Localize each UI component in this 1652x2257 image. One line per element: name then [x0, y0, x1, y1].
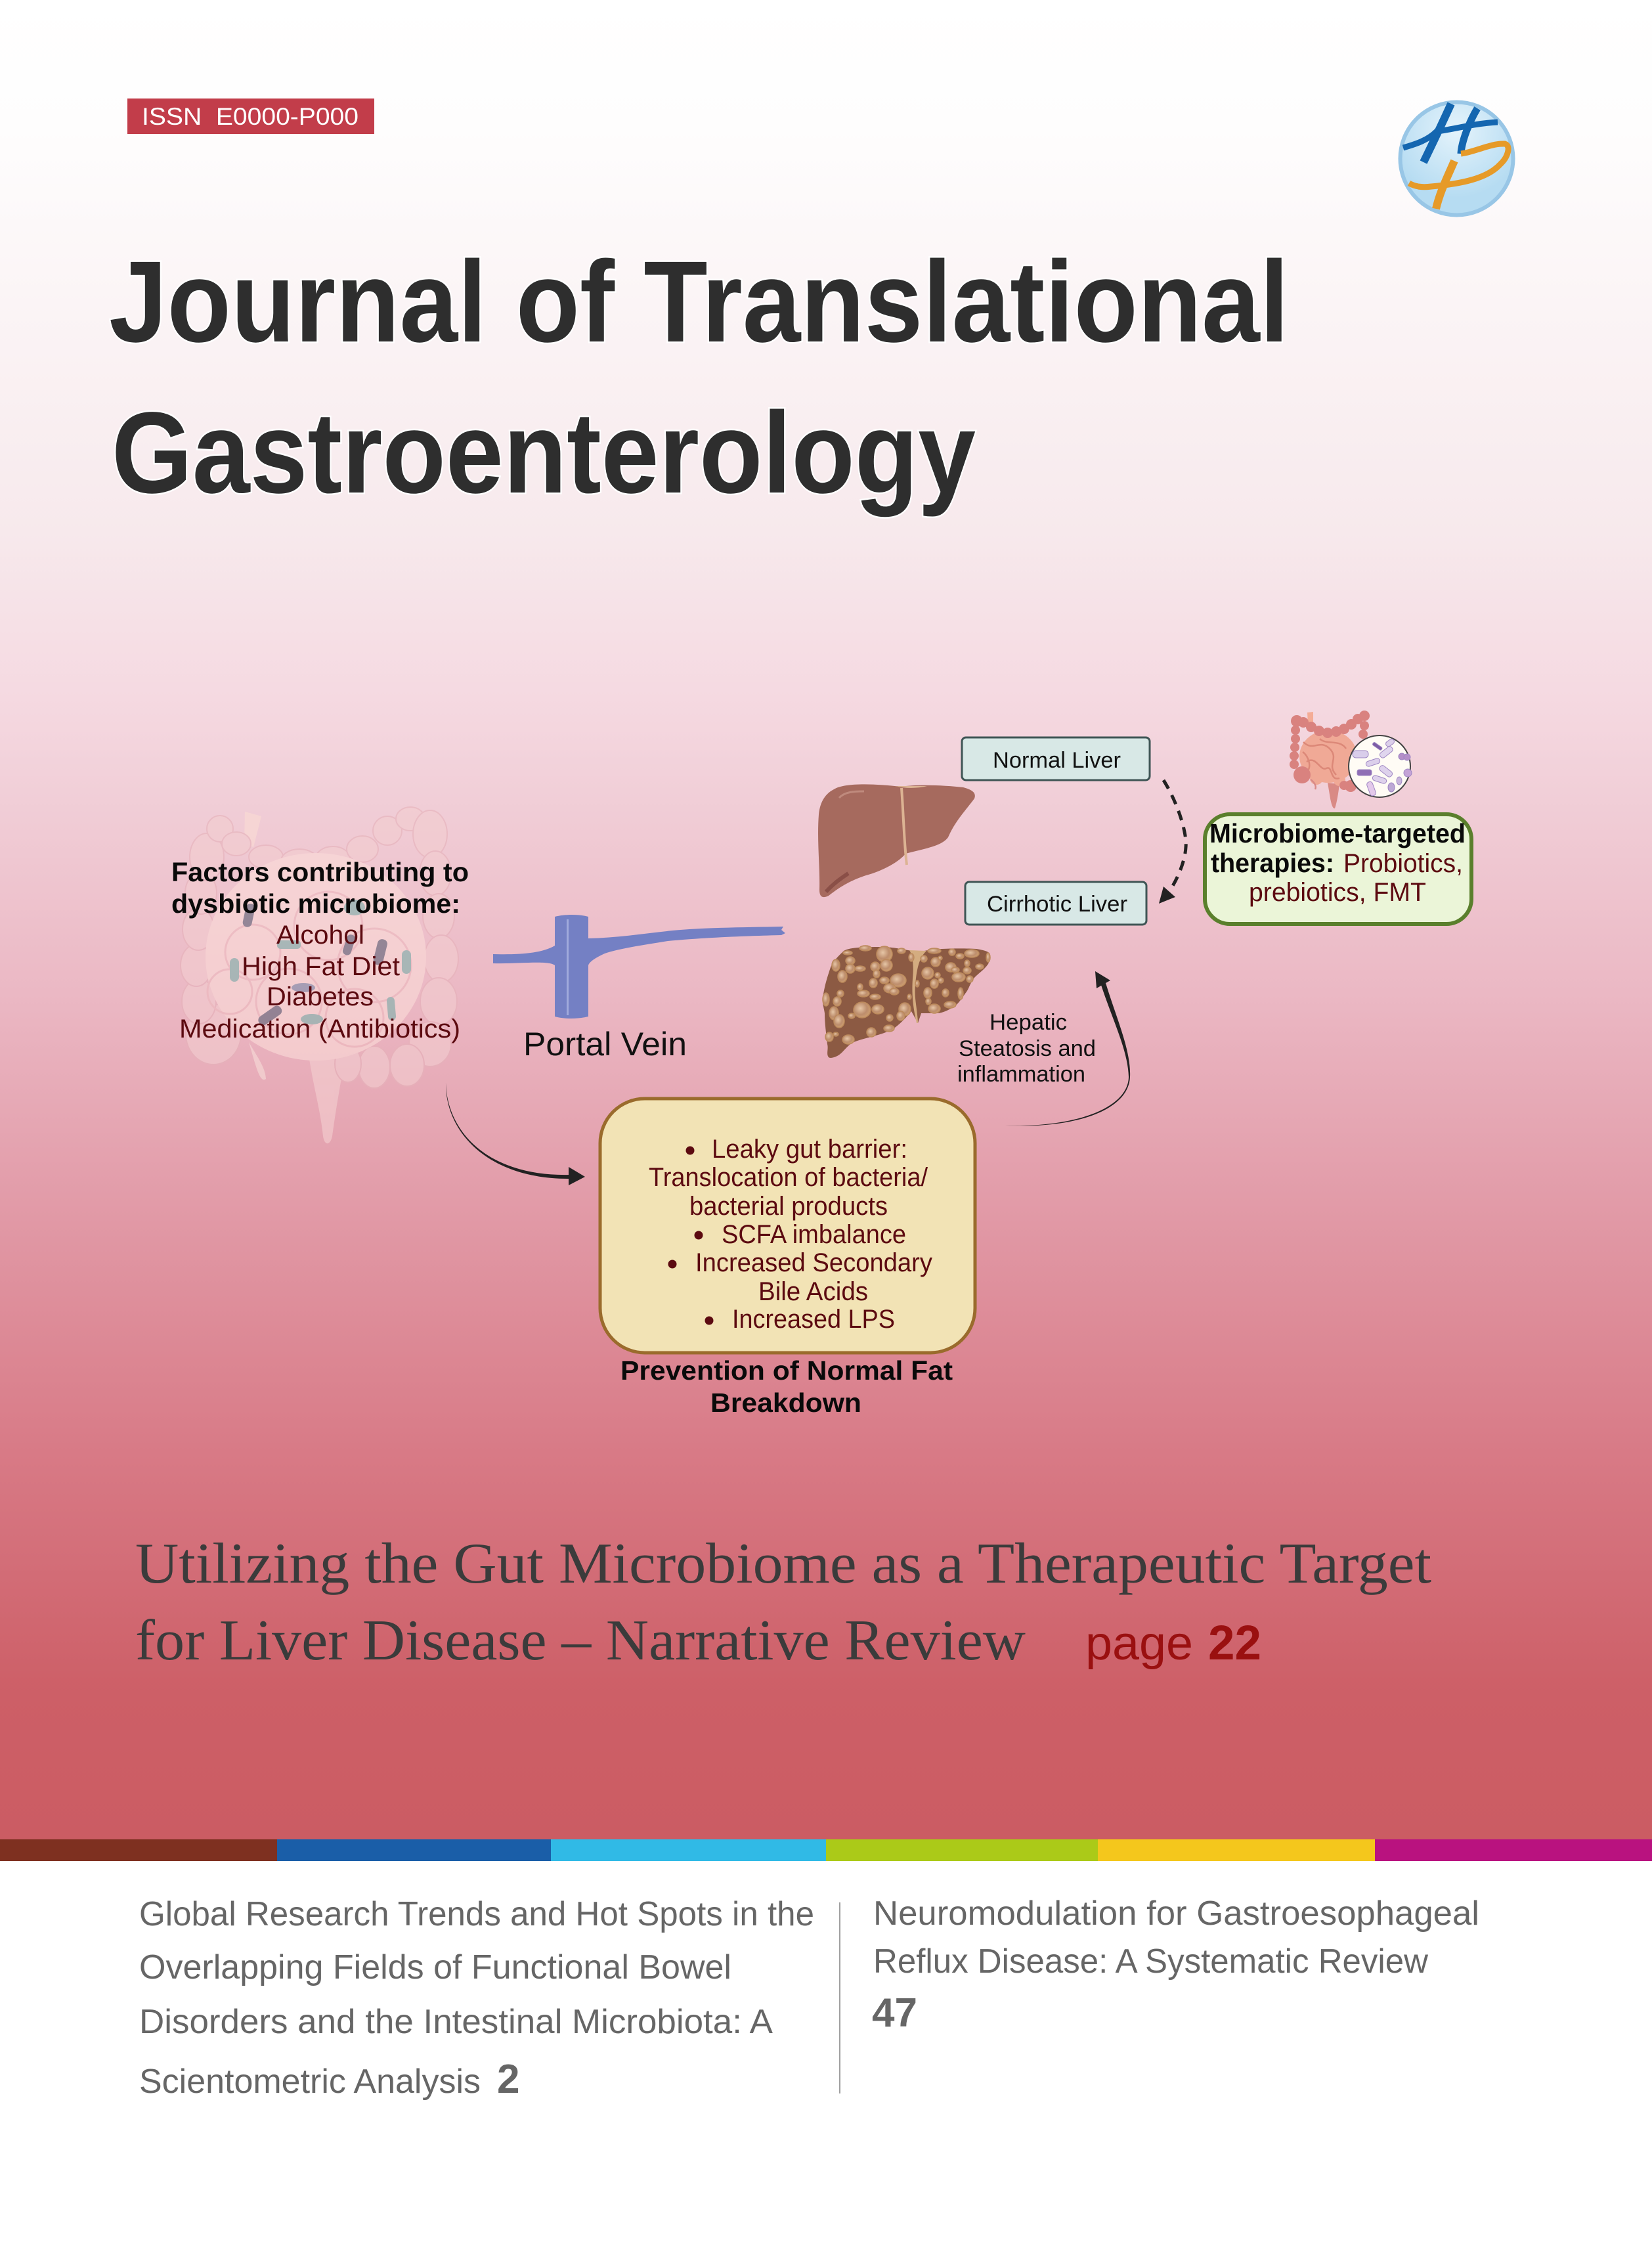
article teaser: left column: Global Research Trends and Hot Spots in the: [139, 1895, 814, 1933]
cover story headline: for Liver Disease – Narrative Review: [135, 1609, 1026, 1673]
text: factors contributing to dysbiotic microbiome: dysbiotic microbiome:: [171, 888, 460, 919]
box: normal liver: [962, 737, 1150, 780]
text: factors contributing to dysbiotic microbiome: Alcohol: [276, 921, 364, 950]
box: leaky gut and metabolic effects: Increased Secondary: [695, 1248, 932, 1277]
text: factors contributing to dysbiotic microbiome: Factors contributing to: [171, 857, 469, 887]
article teaser: left column: Overlapping Fields of Functional Bowel: [139, 1948, 731, 1986]
ISSN badge: [127, 99, 374, 134]
label: prevention of normal fat breakdown: Prevention of Normal Fat: [620, 1355, 953, 1386]
box: leaky gut and metabolic effects: Translocation of bacteria/: [649, 1163, 928, 1192]
article teaser: left column: [139, 1895, 814, 2102]
box: leaky gut and metabolic effects: Increased LPS: [732, 1305, 895, 1334]
label: hepatic steatosis and inflammation: Hepatic: [989, 1010, 1067, 1035]
arrow: steatosis curving up to cirrhotic liver: [1005, 971, 1130, 1126]
text: factors contributing to dysbiotic microbiome: High Fat Diet: [242, 952, 400, 981]
cover story page reference: 22: [1208, 1615, 1261, 1670]
illustration: portal vein: [493, 915, 785, 1019]
cover story page reference: page: [1085, 1617, 1193, 1670]
box: microbiome-targeted therapies: Microbiome-targeted: [1209, 818, 1466, 848]
article teaser: right column: Neuromodulation for Gastroesophageal: [873, 1895, 1479, 1933]
article teaser: left column: Disorders and the Intestinal Microbiota: A: [139, 2003, 773, 2041]
article teaser: left column: Scientometric Analysis: [139, 2063, 481, 2101]
box: microbiome-targeted therapies: therapies:: [1211, 848, 1334, 878]
text: factors contributing to dysbiotic microbiome: Medication (Antibiotics): [179, 1015, 460, 1043]
ISSN badge: ISSN E0000-P000: [142, 103, 359, 130]
cover story page reference: [1085, 1615, 1261, 1670]
illustration: faded intestine: [181, 807, 458, 1143]
arrow: dashed, normal to cirrhotic liver: [1159, 780, 1186, 904]
article teaser: right column: [872, 1895, 1479, 2036]
box: normal liver: Normal Liver: [993, 748, 1121, 773]
illustration: cirrhotic liver: [823, 946, 990, 1058]
title: Gastroenterology: [112, 389, 976, 517]
column divider: [839, 1902, 840, 2093]
title: Journal of Translational: [109, 238, 1289, 366]
box: leaky gut and metabolic effects: [600, 1099, 975, 1353]
title: [109, 238, 1289, 517]
label: hepatic steatosis and inflammation: [957, 1010, 1096, 1087]
label: hepatic steatosis and inflammation: Steatosis and: [959, 1036, 1096, 1061]
icon: publisher logo: [1400, 102, 1513, 215]
illustration: normal liver: [818, 784, 975, 897]
article teaser: right column: Reflux Disease: A Systematic Review: [873, 1942, 1428, 1981]
text: factors contributing to dysbiotic microbiome: [171, 857, 469, 1043]
cover story headline: [135, 1532, 1431, 1673]
label: portal vein: Portal Vein: [523, 1026, 687, 1063]
label: prevention of normal fat breakdown: [620, 1355, 953, 1418]
cover story headline: Utilizing the Gut Microbiome as a Therapeutic Target: [135, 1532, 1431, 1596]
article teaser: left column: 2: [497, 2057, 519, 2102]
box: leaky gut and metabolic effects: SCFA imbalance: [722, 1220, 906, 1249]
arrow: factors to leaky gut box: [446, 1083, 585, 1185]
box: leaky gut and metabolic effects: Leaky gut barrier:: [712, 1135, 907, 1164]
label: hepatic steatosis and inflammation: inflammation: [957, 1062, 1085, 1087]
box: leaky gut and metabolic effects: bacterial products: [689, 1192, 888, 1221]
label: prevention of normal fat breakdown: Breakdown: [710, 1388, 861, 1418]
article teaser: right column: 47: [872, 1990, 917, 2036]
box: cirrhotic liver: Cirrhotic Liver: [987, 892, 1127, 917]
box: microbiome-targeted therapies: [1205, 814, 1471, 924]
box: microbiome-targeted therapies: prebiotics, FMT: [1249, 878, 1426, 907]
box: leaky gut and metabolic effects: Bile Acids: [758, 1277, 868, 1306]
box: cirrhotic liver: [965, 882, 1146, 925]
text: factors contributing to dysbiotic microbiome: Diabetes: [267, 982, 374, 1011]
box: microbiome-targeted therapies: Probiotics,: [1343, 849, 1463, 878]
illustration: gut and microbes: [1290, 711, 1412, 808]
colour strip: [0, 1839, 1652, 1861]
